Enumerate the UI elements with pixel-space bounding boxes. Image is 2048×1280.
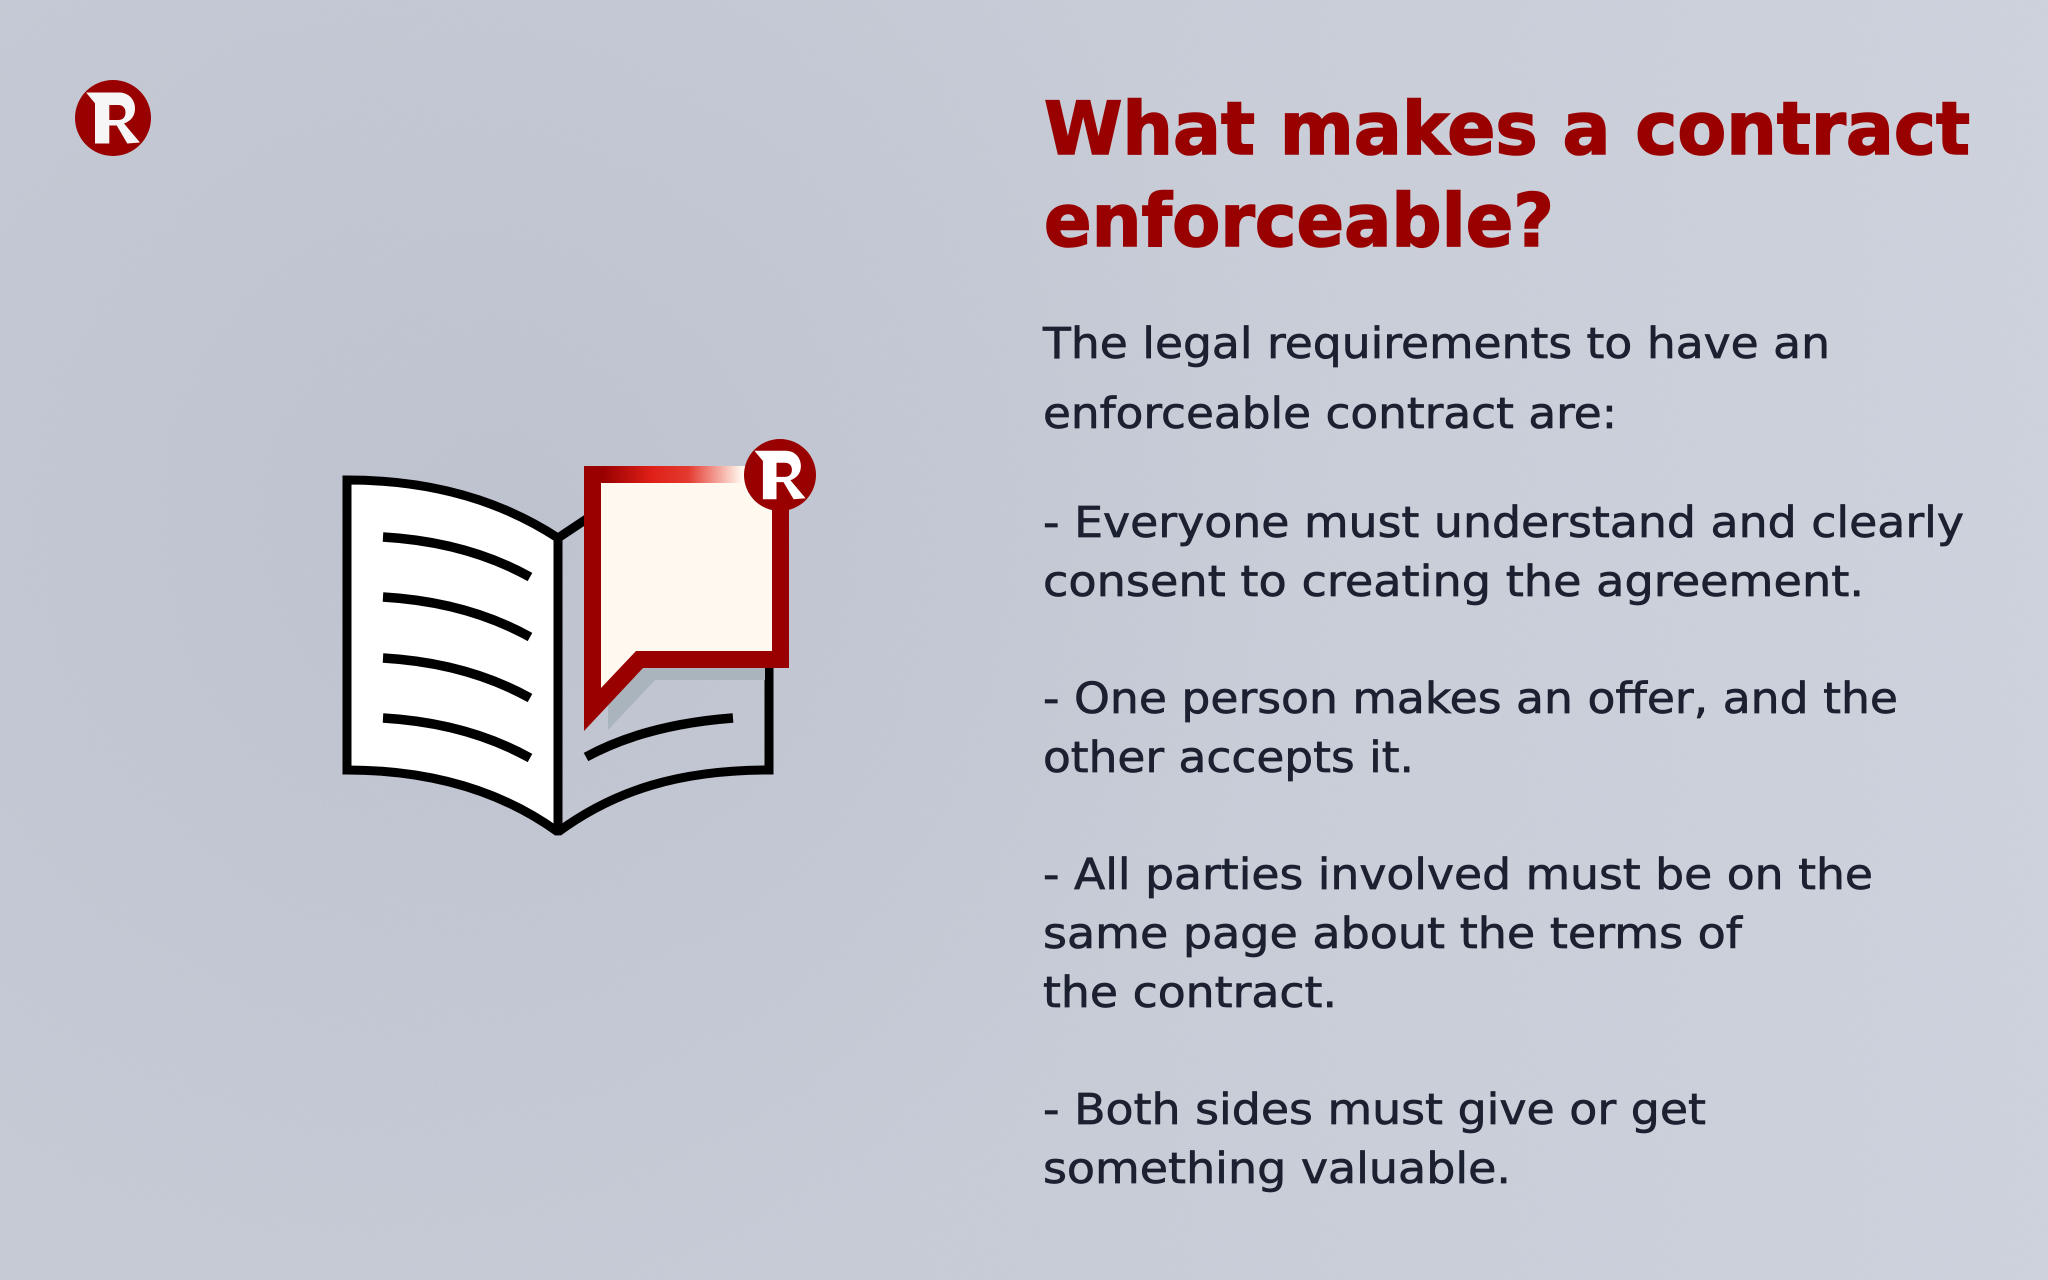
book: right page text line (586, 718, 733, 757)
title: What makes a contract (1044, 87, 1970, 172)
requirement: value exchange (1043, 1085, 1706, 1194)
title (1044, 87, 1970, 264)
intro text: The legal requirements to have an (1042, 319, 1830, 369)
requirement: consent: - Everyone must understand and clearly (1043, 498, 1964, 548)
title: enforceable? (1044, 179, 1554, 264)
requirement: value exchange: - Both sides must give or get (1043, 1085, 1706, 1135)
requirement: same terms: - All parties involved must be on the (1043, 850, 1873, 900)
logo: R badge top left (75, 80, 151, 156)
requirement: value exchange: something valuable. (1043, 1144, 1511, 1194)
requirement: offer and acceptance: other accepts it. (1043, 733, 1414, 783)
requirement: consent (1043, 498, 1964, 607)
requirement: same terms: the contract. (1043, 968, 1337, 1018)
requirement: same terms: same page about the terms of (1043, 909, 1743, 959)
requirement: consent: consent to creating the agreement. (1043, 557, 1864, 607)
icon: open book with speech bubble (347, 439, 816, 836)
speech bubble (584, 466, 789, 731)
requirement: same terms (1043, 850, 1873, 1018)
speech bubble shadow (608, 668, 765, 730)
requirement: offer and acceptance (1043, 674, 1898, 783)
book: left page (347, 480, 558, 832)
intro text (1042, 319, 1830, 439)
requirement: offer and acceptance: - One person makes an offer, and the (1043, 674, 1898, 724)
intro text: enforceable contract are: (1043, 389, 1617, 439)
book: right page outline (558, 510, 769, 832)
speech bubble R badge (744, 439, 816, 511)
book: left page text lines (383, 537, 530, 758)
